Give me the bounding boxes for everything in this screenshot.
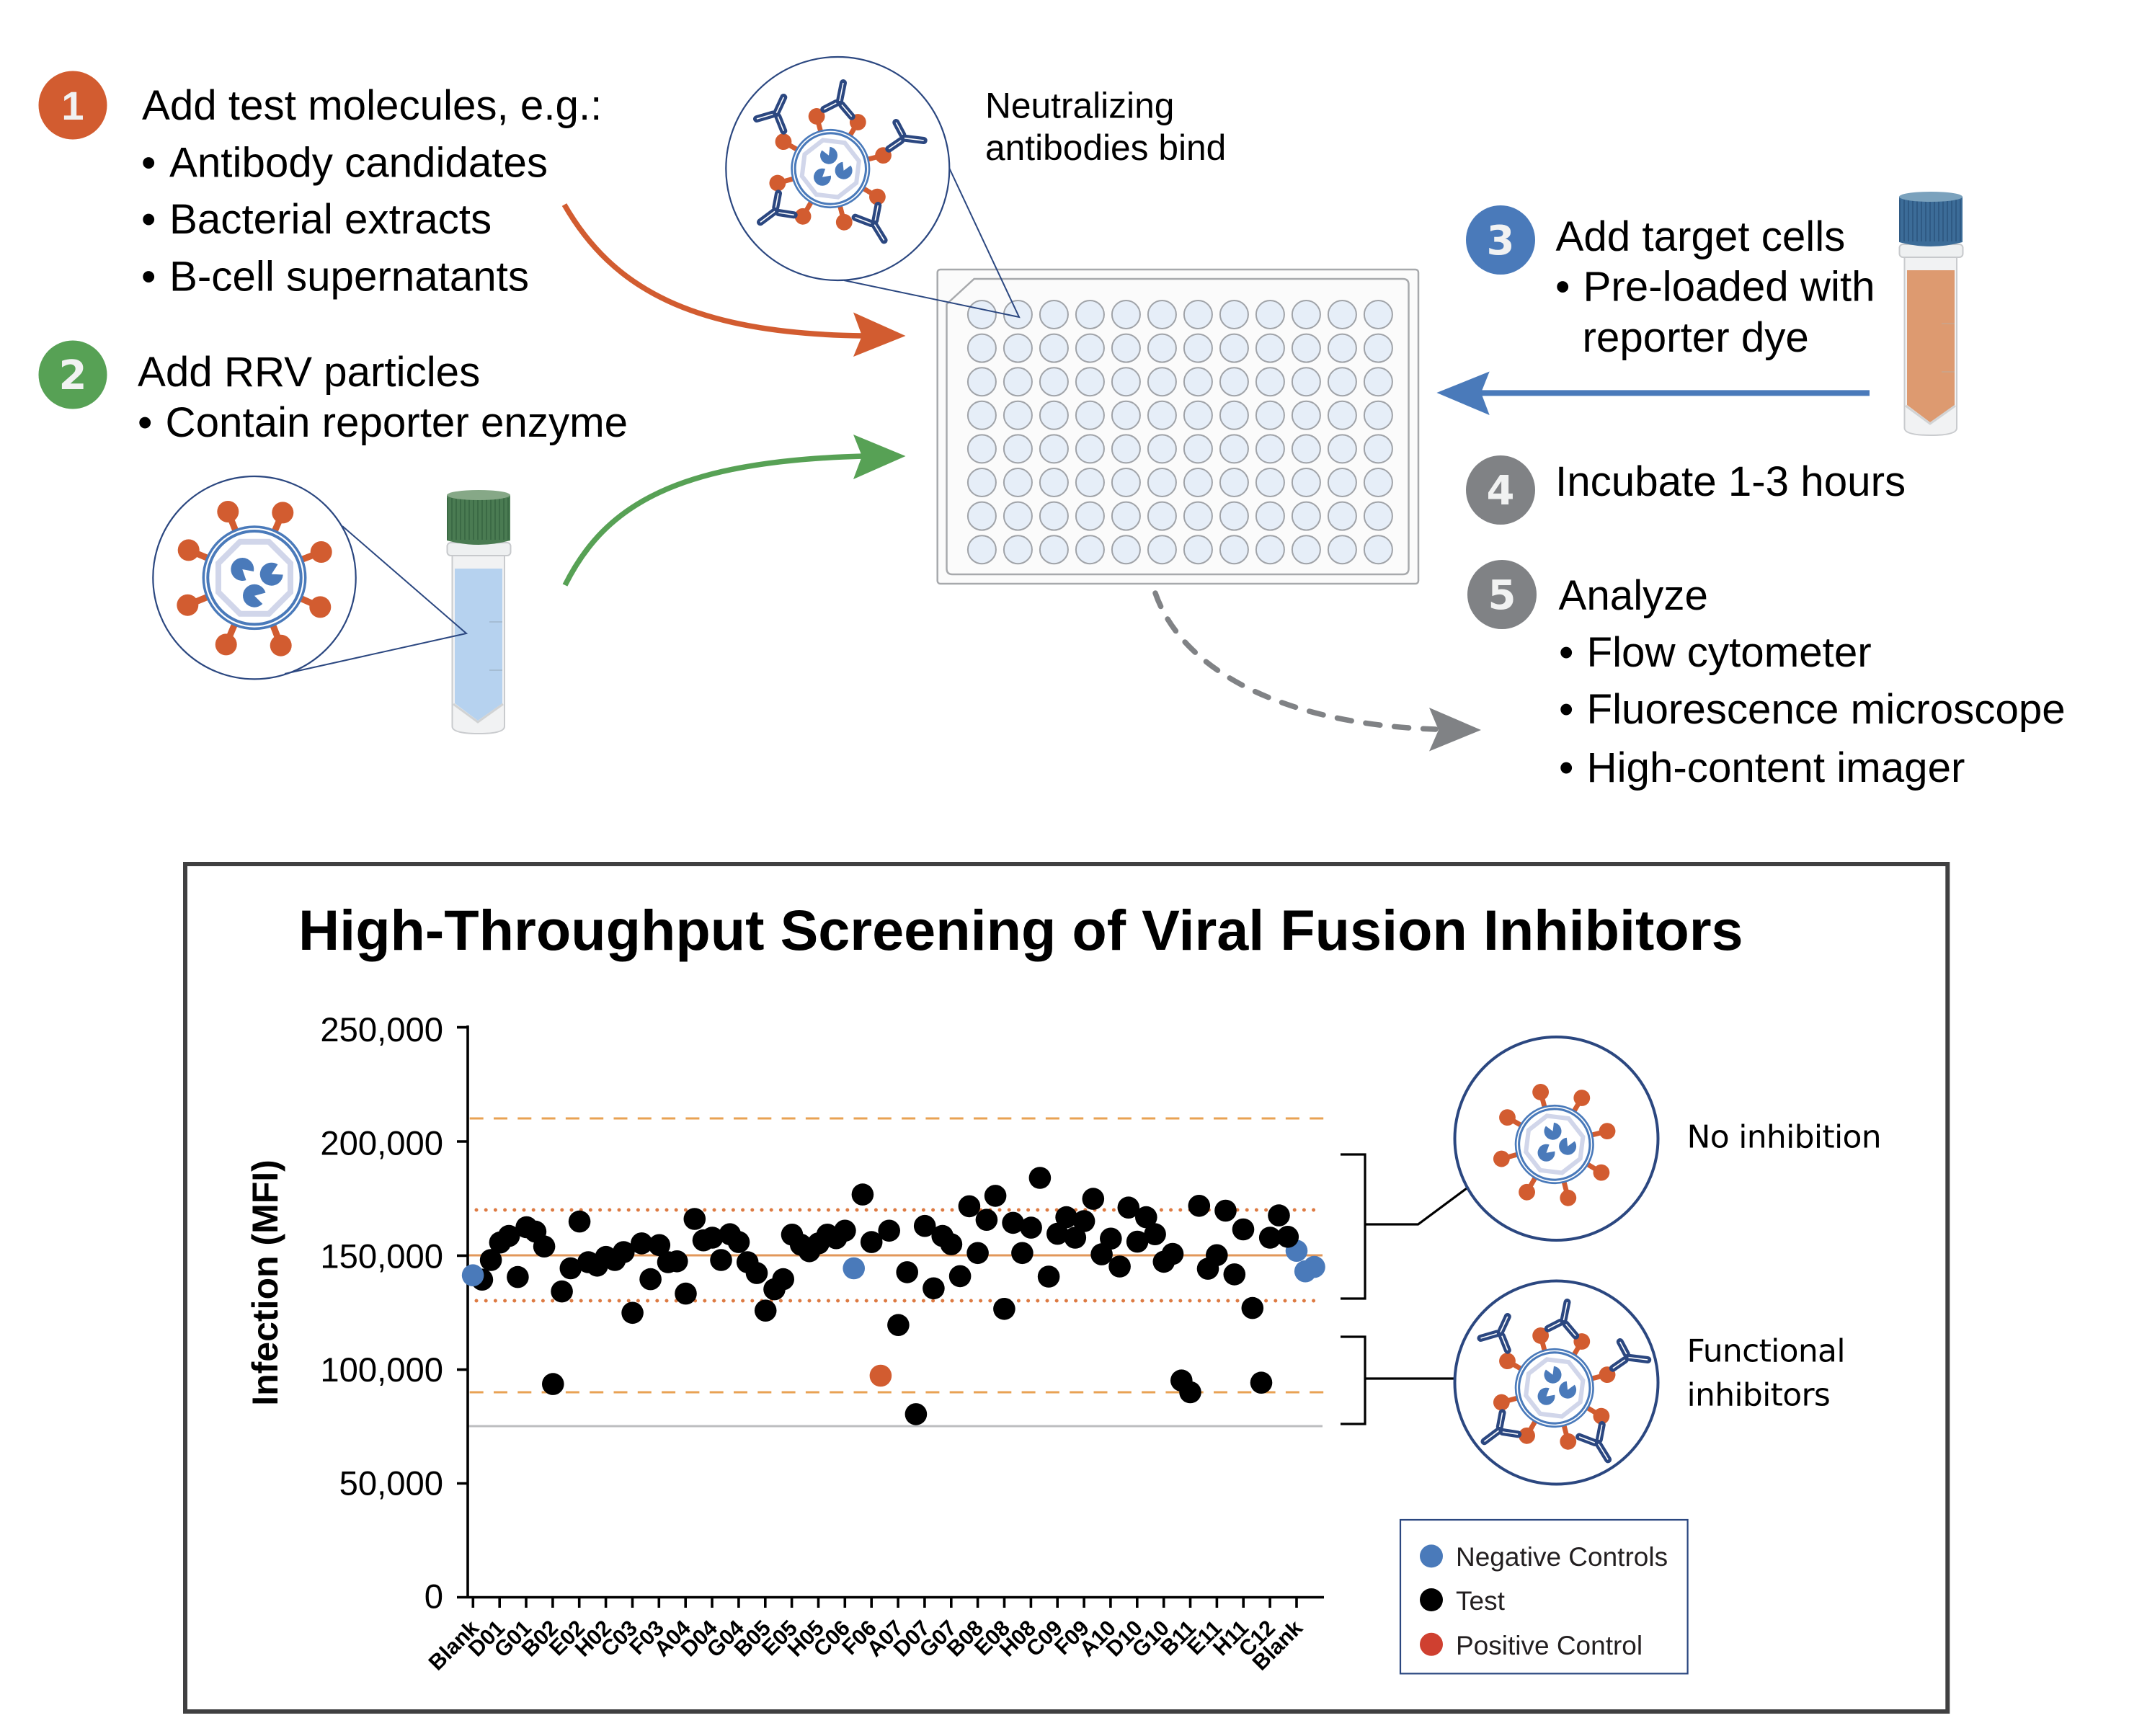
x axis well labels: C06 xyxy=(809,1616,855,1662)
x axis well labels xyxy=(424,1616,1307,1675)
step 1 text: Bacterial extracts xyxy=(169,196,492,243)
x axis well labels: A04 xyxy=(649,1616,695,1662)
x axis well labels: D04 xyxy=(676,1616,722,1662)
y axis title: Infection (MFI) xyxy=(245,1159,285,1406)
icon: tube with RRV particles xyxy=(447,490,510,734)
plate: 96-well plate xyxy=(938,270,1418,584)
badge 1: 1 xyxy=(61,83,84,128)
x axis well labels: C03 xyxy=(596,1616,642,1662)
icon: virus with no inhibition xyxy=(1454,1037,1658,1240)
step 4 text: Incubate 1-3 hours xyxy=(1555,458,1906,505)
label: neutralizing antibodies bind: Neutralizing xyxy=(985,86,1174,126)
step 1: add test molecules xyxy=(39,71,602,300)
step 1 text: • xyxy=(141,196,156,243)
x axis well labels: H11 xyxy=(1209,1616,1253,1660)
x axis well labels: E02 xyxy=(545,1616,590,1660)
data: test wells xyxy=(471,1167,1299,1425)
step 5 text: • xyxy=(1559,686,1573,733)
x axis well labels: B08 xyxy=(942,1616,988,1662)
x axis well labels: G10 xyxy=(1127,1616,1174,1662)
x axis well labels: D07 xyxy=(889,1616,935,1662)
icon: virus with neutralizing antibodies xyxy=(726,57,949,280)
x axis well labels: G07 xyxy=(915,1616,961,1662)
x axis well labels: F03 xyxy=(625,1616,669,1660)
legend: test: Test xyxy=(1456,1586,1506,1616)
step 1 text: B-cell supernatants xyxy=(169,254,529,300)
legend xyxy=(1400,1520,1688,1673)
step 1 text: • xyxy=(141,254,156,300)
x axis well labels: B05 xyxy=(729,1616,775,1662)
label: neutralizing antibodies bind: antibodies bind xyxy=(985,128,1226,168)
label: no inhibition: No inhibition xyxy=(1686,1119,1881,1156)
x axis well labels: E08 xyxy=(970,1616,1015,1660)
x axis well labels: Blank xyxy=(1248,1616,1307,1675)
y axis labels xyxy=(320,1011,443,1616)
legend: positive control: Positive Control xyxy=(1456,1631,1643,1660)
x axis well labels: D10 xyxy=(1101,1616,1147,1662)
badge 1 xyxy=(39,71,107,140)
x axis well labels: F09 xyxy=(1050,1616,1094,1660)
data: negative control under test points xyxy=(1286,1239,1307,1262)
step 2 text: Add RRV particles xyxy=(138,349,480,396)
x axis well labels: E11 xyxy=(1183,1616,1227,1660)
legend: test xyxy=(1420,1586,1506,1616)
x axis well labels: E05 xyxy=(757,1616,802,1660)
badge 2 xyxy=(39,340,107,409)
step 2 text: Contain reporter enzyme xyxy=(166,399,628,446)
x axis well labels: D01 xyxy=(463,1616,510,1662)
bracket: no inhibition xyxy=(1341,1154,1467,1299)
arrow: target cells to plate xyxy=(1436,372,1870,415)
y axis labels: 150,000 xyxy=(320,1238,443,1276)
icon: RRV particle magnified xyxy=(153,476,356,679)
step 1 text: • xyxy=(141,140,156,186)
x axis well labels: B11 xyxy=(1156,1616,1201,1660)
x axis well labels: H05 xyxy=(783,1616,829,1662)
step 4: incubate xyxy=(1466,455,1906,525)
y axis labels: 250,000 xyxy=(320,1011,443,1049)
step 5 text: Flow cytometer xyxy=(1587,629,1872,676)
step 1 text: Add test molecules, e.g.: xyxy=(142,82,602,129)
step 5 text: Fluorescence microscope xyxy=(1587,686,2066,733)
x axis well labels: B02 xyxy=(517,1616,563,1662)
arrow: plate to analysis (dashed) xyxy=(1155,593,1481,751)
badge 5 xyxy=(1467,560,1537,629)
badge 2: 2 xyxy=(59,352,86,399)
x axis well labels: G04 xyxy=(702,1616,749,1662)
step 1 text: Antibody candidates xyxy=(169,140,548,186)
y axis labels: 100,000 xyxy=(320,1351,443,1389)
reference lines xyxy=(468,1118,1324,1426)
badge 3: 3 xyxy=(1487,218,1514,264)
step 2 text: • xyxy=(138,399,152,446)
step 5 text: • xyxy=(1559,629,1573,676)
step 3 text: reporter dye xyxy=(1583,314,1809,361)
icon: virus with functional inhibitors xyxy=(1454,1281,1658,1484)
data: positive control xyxy=(870,1365,892,1386)
step 5: analyze xyxy=(1467,560,2066,791)
data: negative controls xyxy=(462,1256,1325,1286)
x axis well labels: F06 xyxy=(837,1616,881,1660)
step 3 text: Pre-loaded with xyxy=(1583,264,1875,310)
bracket: functional inhibitors xyxy=(1341,1337,1455,1424)
y axis labels: 50,000 xyxy=(339,1464,443,1503)
panel: screening chart xyxy=(185,864,1947,1711)
badge 5: 5 xyxy=(1488,572,1516,619)
icon: tube with target cells xyxy=(1899,192,1963,435)
x axis well labels: H08 xyxy=(995,1616,1041,1662)
y axis labels: 0 xyxy=(425,1578,443,1616)
y axis labels: 200,000 xyxy=(320,1125,443,1163)
arrow: step 2 to plate xyxy=(565,435,905,585)
step 5 text: High-content imager xyxy=(1587,744,1965,791)
badge 3 xyxy=(1466,205,1535,275)
callout lines: antibody virus to well xyxy=(844,168,1019,317)
badge 4: 4 xyxy=(1487,468,1514,515)
step 3 text: • xyxy=(1555,264,1570,310)
x axis well labels: G01 xyxy=(489,1616,536,1662)
arrow: step 1 to plate xyxy=(564,205,905,357)
step 2: add RRV particles xyxy=(39,340,628,446)
badge 4 xyxy=(1466,455,1535,525)
label: functional inhibitors: Functional xyxy=(1686,1333,1845,1370)
x axis well labels: A10 xyxy=(1075,1616,1121,1662)
step 3 text: Add target cells xyxy=(1555,213,1845,260)
x axis well labels: H02 xyxy=(570,1616,616,1662)
x axis well labels: C12 xyxy=(1234,1616,1280,1662)
chart title: High-Throughput Screening of Viral Fusion Inhibitors xyxy=(298,898,1743,962)
step 5 text: Analyze xyxy=(1558,572,1708,619)
x axis well labels: Blank xyxy=(424,1616,484,1675)
label: functional inhibitors: inhibitors xyxy=(1686,1376,1830,1413)
step 3: add target cells xyxy=(1466,205,1875,361)
x axis well labels: A07 xyxy=(862,1616,908,1662)
axes xyxy=(457,1025,1324,1608)
x axis well labels: C09 xyxy=(1021,1616,1067,1662)
step 5 text: • xyxy=(1559,744,1573,791)
legend: negative controls: Negative Controls xyxy=(1456,1542,1668,1572)
callout lines: virus to green tube xyxy=(285,526,466,674)
